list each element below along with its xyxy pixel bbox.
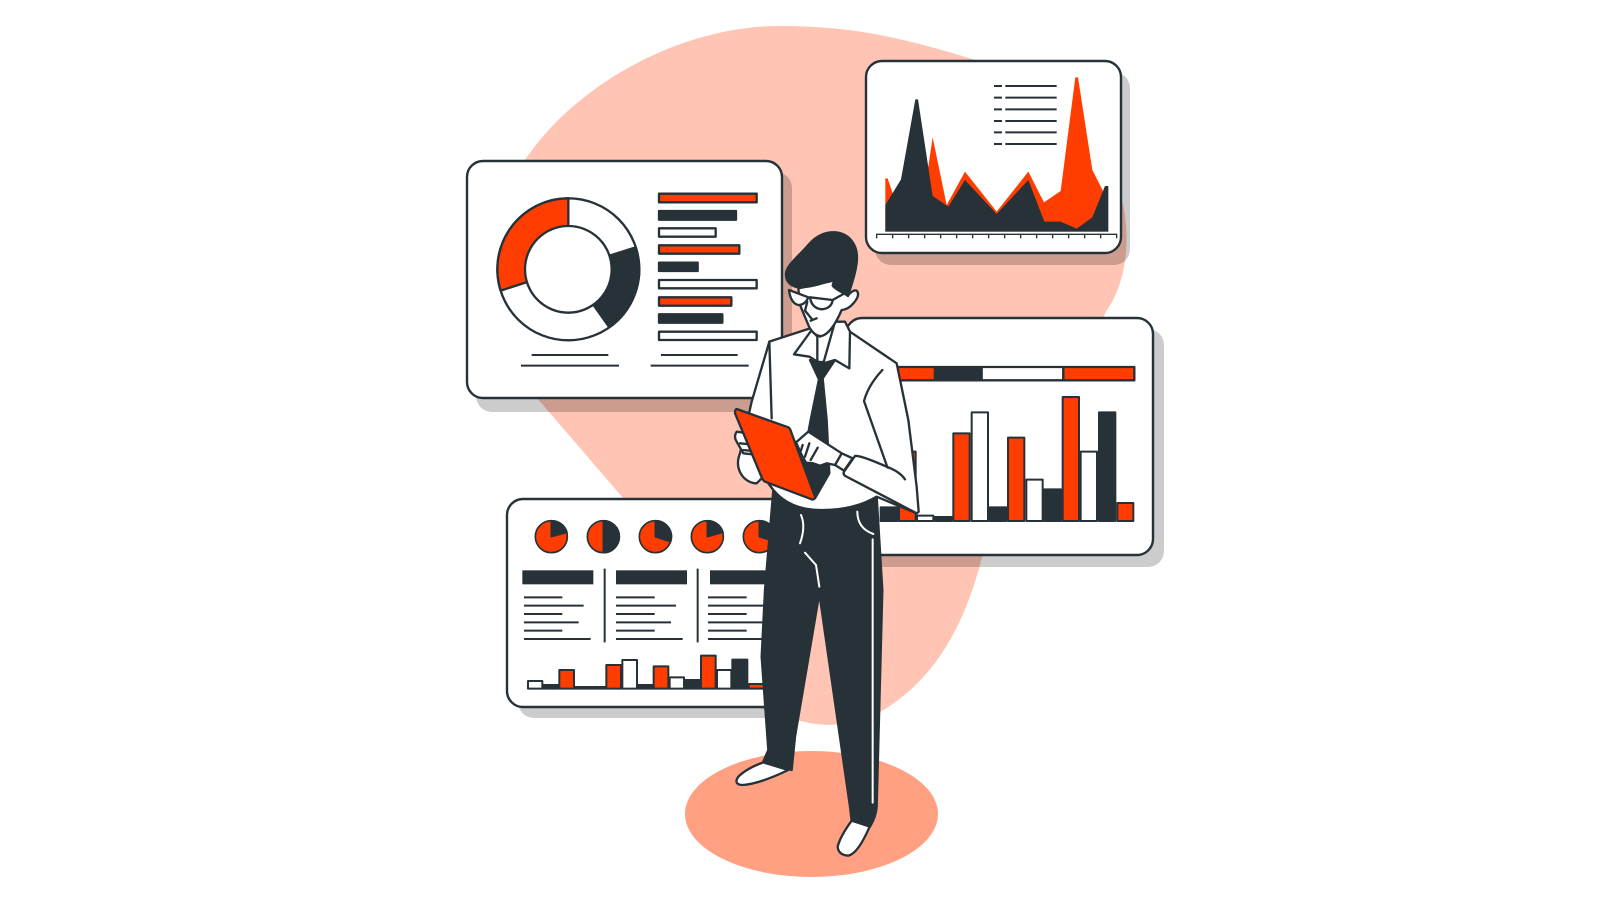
trousers <box>762 490 882 827</box>
axis with ticks <box>877 234 1117 238</box>
panel: area chart <box>866 61 1130 265</box>
caption lines <box>521 355 749 366</box>
glasses <box>789 290 843 309</box>
shoes <box>736 762 870 856</box>
panel card <box>467 161 782 398</box>
right hand <box>796 432 853 471</box>
column headers <box>522 570 781 584</box>
panel shadow <box>518 510 798 718</box>
background blob <box>525 26 1127 725</box>
face and ear <box>798 280 858 336</box>
panel shadow <box>856 329 1164 567</box>
nose and mouth <box>805 302 817 321</box>
forearm outline <box>844 456 917 513</box>
panel shadow <box>476 172 792 412</box>
panel shadow <box>875 72 1130 265</box>
left hand <box>735 432 758 455</box>
figure: man with tablet <box>735 232 919 856</box>
shirt seams <box>769 342 888 470</box>
orange area series <box>885 77 1108 232</box>
panel card <box>866 61 1121 253</box>
panel card <box>507 499 797 707</box>
panel card <box>846 318 1153 555</box>
trouser details <box>800 512 873 803</box>
pie charts row <box>535 521 775 553</box>
donut chart <box>497 198 639 340</box>
shirt <box>738 323 919 513</box>
collar <box>794 322 850 368</box>
panel: bar chart <box>846 318 1164 567</box>
stacked top bar <box>870 367 1134 380</box>
tie <box>803 360 835 498</box>
dark area series <box>885 99 1108 232</box>
column text lines and dividers <box>524 569 773 642</box>
horizontal bars <box>659 194 757 340</box>
panel: donut chart and bars <box>467 161 792 412</box>
small bars <box>528 656 769 689</box>
floor ellipse <box>685 751 938 877</box>
right forearm <box>843 456 917 513</box>
legend lines <box>994 86 1057 144</box>
hair <box>786 232 857 296</box>
tablet <box>735 409 815 499</box>
panel: pies, text columns and small bars <box>507 499 798 718</box>
vertical bars <box>881 397 1133 521</box>
